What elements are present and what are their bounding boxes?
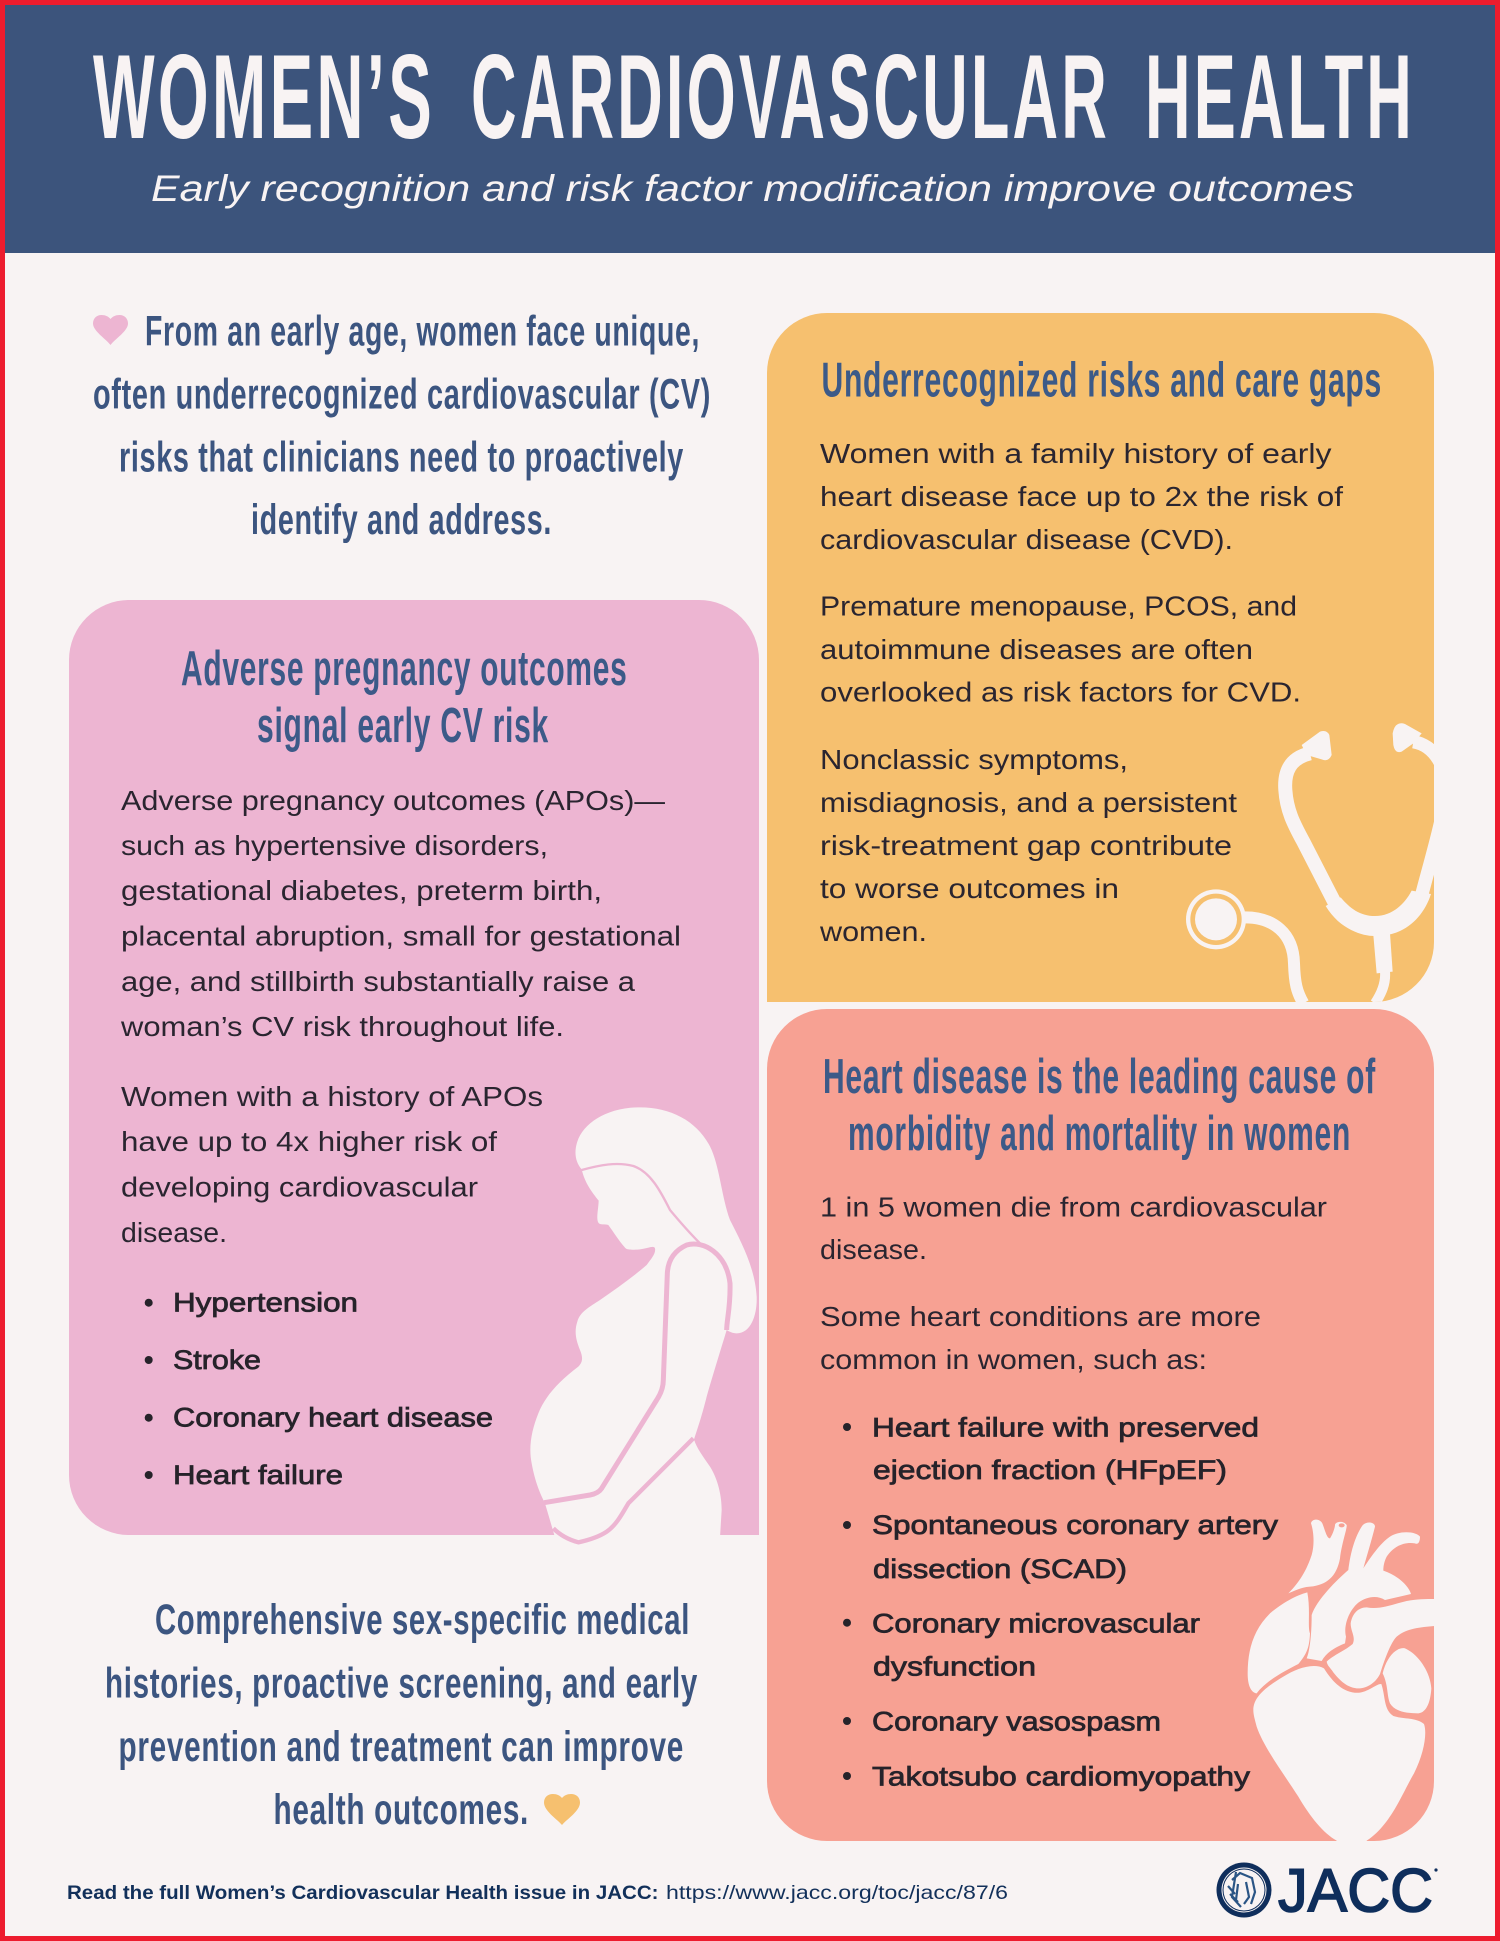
bullet list: heart conditions: Heart failure with preserved <box>872 1413 1259 1443</box>
bullet list: heart conditions <box>843 1413 1279 1792</box>
heading: adverse pregnancy <box>181 642 628 753</box>
closing statement: health outcomes. <box>274 1786 529 1834</box>
heading: leading cause <box>823 1050 1376 1161</box>
icon: pregnant woman silhouette <box>530 1107 757 1542</box>
subtitle: Early recognition and risk factor modification improve outcomes <box>151 168 1354 209</box>
icon: orange heart <box>544 1794 580 1825</box>
bullet list: risks: Coronary heart disease <box>173 1403 493 1433</box>
closing statement: Comprehensive sex-specific medical <box>155 1596 690 1644</box>
body text: treatment gap: women. <box>819 916 927 947</box>
logo seal <box>1216 1862 1272 1918</box>
body text: 1 in 5 women <box>820 1192 1327 1265</box>
body text: family history <box>820 438 1343 555</box>
body text: APOs definition: placental abruption, small for gestational <box>121 920 681 952</box>
bullet list: risks: Hypertension <box>173 1288 358 1318</box>
bullet list: heart conditions: dissection (SCAD) <box>873 1554 1127 1584</box>
body text: 1 in 5 women: 1 in 5 women die from cardiovascular <box>820 1192 1327 1222</box>
footer reference: Read the full Women’s Cardiovascular Health issue in JACC: <box>67 1882 658 1904</box>
intro text: From an early age, women face unique, <box>145 308 700 356</box>
body text: APOs definition: such as hypertensive disorders, <box>121 830 548 861</box>
body text: overlooked factors: overlooked as risk factors for CVD. <box>820 677 1301 708</box>
body text: family history: Women with a family history of early <box>820 438 1332 469</box>
bullet list: risks <box>145 1288 493 1490</box>
bullet list: heart conditions: Takotsubo cardiomyopathy <box>872 1762 1251 1792</box>
body text: 4x higher risk <box>121 1081 543 1248</box>
title: WOMEN’S <box>93 30 435 164</box>
intro text: often underrecognized cardiovascular (CV) <box>93 370 711 418</box>
body text: treatment gap: misdiagnosis, and a persistent <box>820 787 1237 818</box>
JACC logo <box>1216 1856 1438 1924</box>
body text: common conditions: common in women, such as: <box>820 1344 1207 1375</box>
body text: treatment gap: risk-treatment gap contribute <box>820 830 1232 861</box>
body text: treatment gap: to worse outcomes in <box>820 873 1119 904</box>
closing statement: prevention and treatment can improve <box>118 1723 684 1771</box>
bullet list: heart conditions: ejection fraction (HFpEF) <box>873 1455 1227 1485</box>
body text: family history: heart disease face up to 2x the risk of <box>820 481 1343 512</box>
bullet list: heart conditions: Spontaneous coronary artery <box>872 1510 1279 1540</box>
footer reference: https://www.jacc.org/toc/jacc/87/6 <box>666 1882 1008 1904</box>
body text: common conditions <box>820 1301 1261 1375</box>
body text: treatment gap: Nonclassic symptoms, <box>820 744 1128 775</box>
body text: 1 in 5 women: disease. <box>820 1234 927 1265</box>
heading: adverse pregnancy: Adverse pregnancy outcomes <box>181 642 628 696</box>
bullet list: risks: Heart failure <box>173 1460 343 1490</box>
intro text <box>93 308 711 544</box>
body text: 4x higher risk: developing cardiovascular <box>121 1172 478 1202</box>
icon: stethoscope <box>1186 723 1446 1003</box>
icon: pink heart <box>93 315 128 345</box>
body text: 4x higher risk: disease. <box>121 1217 227 1248</box>
panel: heart disease leading cause <box>767 1009 1434 1843</box>
body text: APOs definition: gestational diabetes, preterm birth, <box>121 875 602 906</box>
title <box>93 30 1415 164</box>
closing statement: histories, proactive screening, and early <box>105 1660 698 1708</box>
closing statement <box>105 1596 698 1834</box>
bullet list: heart conditions: Coronary microvascular <box>872 1609 1200 1639</box>
body text: overlooked factors: Premature menopause, PCOS, and <box>820 591 1297 622</box>
body text: family history: cardiovascular disease (CVD). <box>820 524 1233 555</box>
body text: 4x higher risk: have up to 4x higher risk of <box>121 1126 497 1157</box>
header banner <box>0 0 1500 253</box>
panel: underrecognized risks <box>767 313 1446 1003</box>
body text: APOs definition <box>120 785 681 1042</box>
icon: anatomical heart <box>1248 1520 1434 1843</box>
intro statement <box>93 308 711 544</box>
body text: treatment gap <box>819 744 1237 947</box>
intro text: identify and address. <box>251 496 552 544</box>
panel: adverse pregnancy outcomes <box>69 600 759 1542</box>
body text: APOs definition: woman’s CV risk throughout life. <box>120 1011 564 1042</box>
footer reference <box>67 1882 1008 1904</box>
body text: common conditions: Some heart conditions are more <box>820 1301 1261 1332</box>
intro text: risks that clinicians need to proactively <box>119 434 684 482</box>
body text: overlooked factors: autoimmune diseases are often <box>820 634 1253 665</box>
bullet list: heart conditions: dysfunction <box>873 1652 1036 1682</box>
body text: APOs definition: age, and stillbirth substantially raise a <box>121 966 636 997</box>
body text: overlooked factors <box>820 591 1301 708</box>
bullet list: risks: Stroke <box>173 1345 261 1375</box>
heading: adverse pregnancy: signal early CV risk <box>257 699 549 753</box>
logo wordmark: JACC <box>1278 1856 1433 1924</box>
body text: 4x higher risk: Women with a history of APOs <box>121 1081 543 1112</box>
body text: APOs definition: Adverse pregnancy outcomes (APOs)— <box>121 785 666 816</box>
bullet list: heart conditions: Coronary vasospasm <box>872 1707 1161 1737</box>
